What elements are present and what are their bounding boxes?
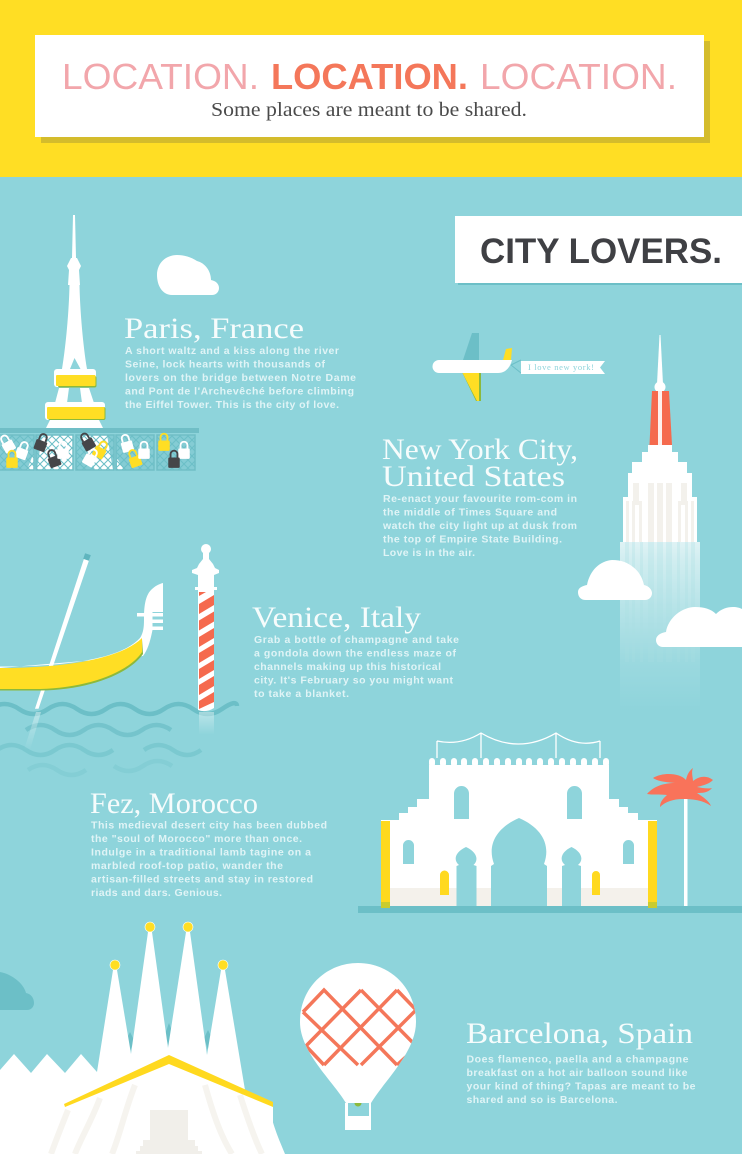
icon: palm tree	[647, 768, 713, 906]
text block: New York: Re-enact your favourite rom-com in	[383, 493, 577, 505]
text block: Barcelona: breakfast on a hot air balloon sound like	[466, 1067, 688, 1079]
icon: dark cloud at left edge	[0, 972, 34, 1010]
icon: hot air balloon	[300, 963, 420, 1130]
text block: Venice: Venice, Italy	[252, 601, 421, 634]
text block: Paris: Paris, France	[124, 312, 304, 345]
text block: Fez: artisan-filled streets and stay in restored	[91, 874, 313, 886]
text block: Barcelona: Does flamenco, paella and a champagne	[466, 1054, 689, 1066]
palace side pillars	[381, 821, 657, 907]
text block: Paris: Seine, lock hearts with thousands of	[125, 358, 326, 370]
icon: cloud near Paris	[157, 255, 219, 295]
section heading: city lovers	[455, 216, 742, 285]
text block: Barcelona: Barcelona, Spain	[466, 1017, 693, 1050]
text block: Fez: the "soul of Morocco" more than once.	[91, 833, 302, 845]
palace windows and arches	[403, 786, 634, 906]
icon: Empire State Building	[620, 335, 700, 712]
icon: Moroccan palace	[358, 733, 742, 913]
icon: gondola	[0, 553, 163, 750]
yellow roofline	[64, 1055, 273, 1107]
text block: Fez: Indulge in a traditional lamb tagine on a	[91, 846, 311, 858]
text block: Venice	[252, 601, 459, 700]
text block: New York: watch the city light up at dusk from	[382, 520, 577, 532]
text block: Paris: lovers on the bridge between Notre Dame	[125, 372, 356, 384]
title: LOCATION.	[62, 56, 259, 97]
text block: New York: New York City,	[382, 433, 578, 466]
text block: Fez	[90, 787, 327, 899]
text block: New York: United States	[382, 460, 565, 493]
text block: Venice: to take a blanket.	[254, 688, 349, 700]
text block: New York: the top of Empire State Building.	[383, 534, 562, 546]
palace wires	[437, 733, 600, 758]
text block: Paris: and Pont de l'Archevêché before climbing	[125, 386, 354, 398]
text block: New York	[382, 433, 578, 559]
text block: Venice: city. It's February so you might want	[254, 674, 454, 686]
text block: New York: Love is in the air.	[383, 547, 475, 559]
title	[62, 56, 677, 97]
section heading: city lovers: CITY LOVERS.	[480, 232, 722, 271]
icon: Sagrada Familia	[0, 922, 285, 1154]
text block: Barcelona: your kind of thing? Tapas are meant to be	[466, 1080, 696, 1092]
text block: Fez: riads and dars. Genious.	[91, 887, 222, 899]
icon: cloud at right edge	[656, 607, 742, 647]
icon: plane with banner: I love new york!	[528, 362, 594, 372]
text block: Paris	[124, 312, 356, 411]
text block: Paris: the Eiffel Tower. This is the city of love.	[125, 399, 339, 411]
title card	[35, 35, 704, 137]
palace walls	[381, 758, 657, 906]
text block: Venice: Grab a bottle of champagne and take	[254, 634, 459, 646]
text block: New York: the middle of Times Square and	[383, 506, 557, 518]
icon: Eiffel Tower	[45, 215, 106, 428]
text block: Fez: marbled roof-top patio, wander the	[91, 860, 283, 872]
icon: striped mooring pole	[192, 544, 219, 735]
love locks	[0, 431, 190, 468]
title: LOCATION.	[480, 56, 677, 97]
facade details	[51, 1085, 262, 1154]
bridge with love locks	[0, 428, 199, 470]
icon: cloud beside Empire State	[578, 560, 652, 600]
subtitle: Some places are meant to be shared.	[211, 99, 527, 121]
text block: Barcelona: shared and so is Barcelona.	[466, 1094, 618, 1106]
icon: plane with banner	[433, 333, 605, 401]
header band	[0, 0, 742, 177]
text block: Paris: A short waltz and a kiss along the river	[125, 345, 339, 357]
text block: Fez: This medieval desert city has been dubbed	[91, 820, 327, 832]
text block: Fez: Fez, Morocco	[90, 787, 258, 820]
text block: Venice: channels making up this historical	[254, 661, 441, 673]
text block: Barcelona	[466, 1017, 696, 1106]
text block: Venice: a gondola down the endless maze of	[254, 648, 456, 660]
water waves	[0, 703, 237, 775]
spire finials	[110, 922, 228, 970]
title card shadow	[41, 41, 710, 143]
title: LOCATION.	[271, 56, 468, 97]
